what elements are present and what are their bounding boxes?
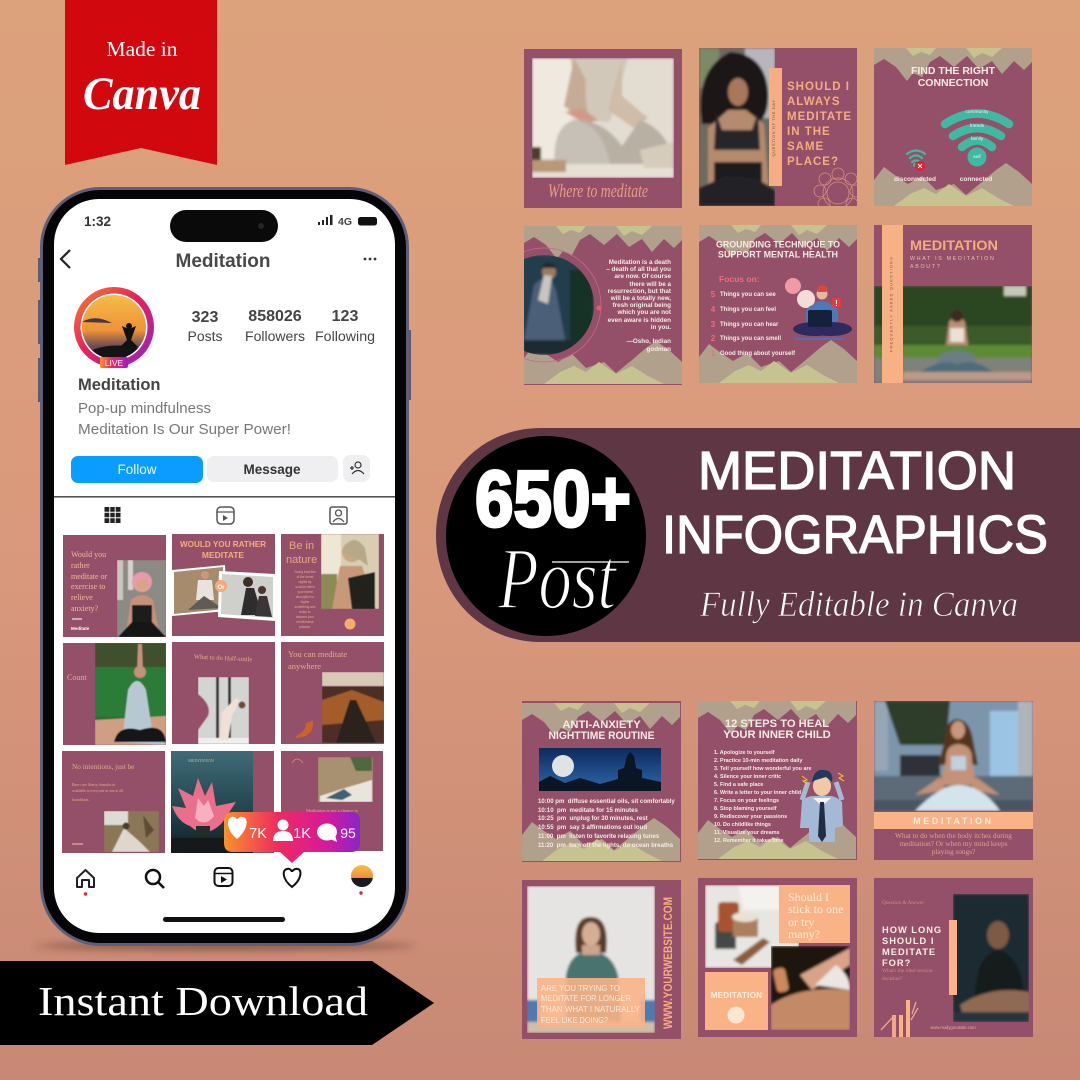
- action buttons: [71, 455, 370, 483]
- template tile: 12 steps to heal your inner child: 7. Focus on your feelings: [714, 798, 779, 804]
- template tile: where to meditate: [524, 49, 682, 208]
- template tile: Osho quote: are now. Of course: [615, 273, 671, 280]
- template tile: your website: [522, 880, 681, 1039]
- template tile: how long should I meditate: duration?: [882, 976, 903, 982]
- phone feed post: rather meditate or exercise: rather: [71, 561, 90, 570]
- bottom navigation: [77, 865, 374, 922]
- phone feed post: child pose: Meditation is not a chance to: [306, 808, 359, 813]
- template tile: grounding technique: 1: [711, 349, 716, 358]
- template tile: grounding technique: Things you can hear: [720, 322, 779, 328]
- template tile: grounding technique: 3: [711, 320, 716, 329]
- action buttons: Follow: [117, 462, 157, 477]
- phone feed post: would you rather meditate: MEDITATE: [202, 550, 244, 560]
- template tile: Osho quote: even aware is hidden: [608, 317, 671, 324]
- template tile: 12 steps to heal your inner child: 3. Tell yourself how wonderful you are: [714, 766, 812, 772]
- illustration: seated person with laptop: [785, 278, 852, 340]
- template tile: Osho quote: Meditation is a death: [609, 259, 671, 266]
- profile bio: Pop-up mindfulness: [78, 401, 211, 417]
- template tile: your website: MEDITATE FOR LONGER: [541, 994, 631, 1003]
- template tile: grounding technique: Things you can see: [720, 292, 776, 298]
- phone feed post: be in nature: of the forest: [297, 575, 314, 579]
- phone feed post: be in nature: something and: [295, 605, 316, 609]
- notification badge: 7K likes, 1K followers, 95 comments: 1K: [293, 826, 311, 842]
- template tile: 12 steps to heal your inner child: 2. Practice 10-min meditation daily: [714, 758, 802, 764]
- template tile: 12 steps to heal your inner child: YOUR INNER CHILD: [723, 729, 831, 741]
- template tile: where to meditate: Where to meditate: [548, 181, 648, 202]
- ribbon: instant download: Instant Download: [38, 978, 368, 1024]
- heading: MEDITATION: [698, 441, 1016, 501]
- template tile: 12 steps to heal your inner child: 1. Apologize to yourself: [714, 750, 775, 756]
- profile stats: [187, 308, 375, 344]
- phone feed post: half-smile: [172, 642, 275, 744]
- profile bio: Meditation: [78, 376, 160, 394]
- phone feed post: would you rather meditate: WOULD YOU RATHER: [180, 539, 266, 549]
- template tile: find the right connection: CONNECTION: [918, 77, 988, 89]
- template tile: grounding technique: 2: [711, 334, 716, 343]
- badge: 650+ Post: Post: [497, 531, 618, 628]
- phone feed post: be in nature: balance your: [296, 615, 315, 619]
- icon: mandala: [814, 168, 857, 206]
- profile tabs: [54, 496, 395, 524]
- profile stats: 123: [332, 308, 358, 325]
- template tile: grounding technique: 4: [711, 305, 716, 314]
- template tile: 12 steps to heal your inner child: 9. Rediscover your passions: [714, 814, 787, 820]
- template tile: should I stick to one: Should I: [788, 890, 829, 904]
- template tile: Osho quote: which you are not: [616, 309, 672, 316]
- template tile: your website: THAN WHAT I NATURALLY: [541, 1005, 641, 1014]
- template tile: should I stick to one: or try: [788, 915, 814, 929]
- template tile: should I always meditate in the same place: PLACE?: [787, 156, 839, 168]
- template tile: grounding technique: Focus on:: [719, 274, 760, 284]
- notification badge: 7K likes, 1K followers, 95 comments: [224, 812, 360, 863]
- template tile: grounding technique: SUPPORT MENTAL HEALTH: [718, 250, 838, 260]
- phone feed post: be in nature: nights by: [299, 580, 312, 584]
- notification badge: 7K likes, 1K followers, 95 comments: 7K: [249, 826, 267, 842]
- template tile: anti-anxiety nighttime routine: 11:00 pm listen to favorite relaxing tunes: [538, 833, 660, 840]
- ribbon: Made in Canva: Made in: [106, 37, 178, 61]
- template tile: should I always meditate in the same place: SAME: [787, 141, 824, 153]
- phone feed post: no intentions: foundation.: [72, 798, 89, 802]
- template tile: should I stick to one: stick to one: [788, 902, 843, 916]
- icon: disconnected wifi: [907, 150, 925, 171]
- phone feed post: rather meditate or exercise: anxiety?: [71, 604, 99, 613]
- night sky image: [539, 748, 661, 791]
- phone feed post: no intentions: Bare-care liberty formula its: [72, 783, 116, 787]
- template tile: should I stick to one: [698, 878, 857, 1037]
- phone feed post: be in nature: [281, 534, 384, 636]
- template tile: Osho quote: there will be a: [629, 281, 671, 288]
- icon: wifi signal: [945, 109, 1009, 166]
- template tile: should I stick to one: MEDITATION: [711, 991, 762, 1000]
- template tile: 12 steps to heal your inner child: 4. Silence your inner critic: [714, 774, 781, 780]
- template tile: anti-anxiety nighttime routine: 10:00 pm diffuse essential oils, sit comfortably: [538, 798, 675, 805]
- icon: bamboo: [881, 1000, 918, 1037]
- template tile: Osho quote: – death of all that you: [606, 266, 671, 273]
- template tile: how long should I meditate: MEDITATE: [882, 947, 936, 957]
- template tile: should I always meditate in the same place: QUESTION OF THE DAY: [771, 99, 776, 157]
- template tile: 12 steps to heal your inner child: 12 STEPS TO HEAL: [725, 718, 829, 730]
- template tile: how long should I meditate: [874, 878, 1033, 1037]
- template tile: Osho quote: in you.: [651, 324, 671, 331]
- phone feed post: be in nature: sounds within: [295, 585, 315, 589]
- phone feed post: be in nature: mindfulness: [296, 620, 314, 624]
- icon: wifi signal: family: [971, 136, 984, 142]
- illustration: seated person with laptop: !: [835, 299, 838, 308]
- illustration: stressed man: [800, 770, 844, 842]
- template tile: grounding technique: Good thing about yourself: [720, 351, 796, 357]
- template tile: meditation rooftop photo: [874, 701, 1033, 860]
- profile avatar: LIVE: [105, 358, 124, 368]
- icon: heart: [228, 817, 247, 839]
- status bar: 4G: [338, 216, 352, 228]
- template tile: meditation rooftop photo: What to do when the body itches during: [895, 831, 1012, 840]
- template tile: how long should I meditate: What's the ideal session: [882, 968, 933, 974]
- phone feed post: be in nature: Young travelers: [294, 570, 316, 574]
- template tile: anti-anxiety nighttime routine: 10:55 pm say 3 affirmations out loud: [538, 824, 647, 831]
- phone feed post: child pose: [281, 751, 383, 851]
- template tile: 12 steps to heal your inner child: 11. Visualize your dreams: [714, 830, 780, 836]
- status bar: 1:32: [84, 214, 111, 229]
- status bar: [84, 210, 377, 242]
- profile stats: 323: [192, 309, 218, 326]
- template tile: Osho quote: [524, 226, 682, 385]
- template tile: find the right connection: [874, 48, 1032, 206]
- profile header: Meditation: [176, 251, 270, 272]
- phone feed post: would you rather meditate: [172, 534, 275, 636]
- profile header: [61, 250, 376, 272]
- profile bio: Meditation Is Our Super Power!: [78, 422, 291, 438]
- template tile: meditation frequently asked questions: [874, 225, 1032, 383]
- profile stats: Posts: [187, 328, 223, 344]
- ribbon: Made in Canva: [65, 0, 217, 165]
- template tile: meditation rooftop photo: meditation? Or when my mind keeps: [899, 839, 1008, 848]
- template tile: how long should I meditate: HOW LONG: [882, 925, 942, 935]
- phone feed post: count: Count: [67, 673, 87, 682]
- phone feed post: no intentions: [62, 751, 165, 853]
- template tile: Osho quote: fresh original being: [613, 302, 671, 309]
- template tile: how long should I meditate: Question & Answer: [882, 900, 924, 906]
- phone feed post: rather meditate or exercise: [63, 535, 166, 637]
- template tile: find the right connection: connected: [960, 176, 992, 183]
- template tile: grounding technique: 5: [711, 290, 716, 299]
- template tile: your website: WWW.YOURWEBSITE.COM: [663, 897, 675, 1029]
- phone feed post: be in nature: nature: [286, 554, 317, 566]
- phone feed post: be in nature: absorption to: [296, 595, 314, 599]
- template tile: meditation rooftop photo: playing songs?: [932, 847, 975, 856]
- template tile: anti-anxiety nighttime routine: [522, 701, 681, 862]
- phone feed post: would you rather meditate: Or: [217, 585, 225, 591]
- heading: [662, 441, 1048, 565]
- template tile: how long should I meditate: SHOULD I: [882, 936, 934, 946]
- template tile: 12 steps to heal your inner child: 8. Stop blaming yourself: [714, 806, 777, 812]
- action buttons: Message: [243, 462, 301, 477]
- phone feed post: no intentions: available to everyone at one at all: [72, 789, 123, 793]
- template tile: grounding technique: Things you can smell: [720, 336, 781, 342]
- template tile: anti-anxiety nighttime routine: 10:25 pm unplug for 30 minutes, rest: [538, 815, 648, 822]
- template tile: grounding technique: Things you can feel: [720, 307, 776, 313]
- template tile: meditation frequently asked questions: WHAT IS MEDITATION: [910, 256, 996, 262]
- heading: INFOGRAPHICS: [662, 505, 1048, 565]
- icon: lotus emblem: [728, 1006, 744, 1024]
- template tile: find the right connection: FIND THE RIGHT: [911, 65, 996, 77]
- template tile: 12 steps to heal your inner child: 5. Find a safe place: [714, 782, 763, 788]
- template tile: 12 steps to heal your inner child: 6. Write a letter to your inner child: [714, 790, 801, 796]
- template tile: Osho quote: will be a totally new,: [610, 295, 671, 302]
- template tile: grounding technique: GROUNDING TECHNIQUE TO: [716, 240, 840, 250]
- phone feed post: be in nature: helps to: [299, 610, 311, 614]
- template tile: should I always meditate in the same place: MEDITATE: [787, 111, 852, 123]
- template tile: meditation frequently asked questions: ABOUT?: [910, 264, 941, 270]
- profile stats: Followers: [245, 328, 305, 344]
- phone feed post: no intentions: No intentions, just be: [72, 762, 134, 771]
- phone feed post: lotus: MEDITATION: [188, 758, 214, 763]
- phone feed post: be in nature: Be in: [289, 540, 314, 552]
- template tile: should I always meditate in the same place: IN THE: [787, 126, 831, 138]
- phone feed post: be in nature: your forest: [297, 590, 313, 594]
- icon: wifi signal: community: [965, 109, 989, 115]
- profile avatar: [74, 287, 154, 368]
- tagline: Fully Editable in Canva: [699, 584, 1018, 624]
- badge: 650+ Post: [446, 436, 646, 636]
- banner: 650+ meditation infographics: [436, 428, 1080, 642]
- profile bio: [78, 376, 291, 438]
- phone feed post: rather meditate or exercise: relieve: [71, 593, 93, 602]
- template tile: 12 steps to heal your inner child: [698, 701, 857, 860]
- phone mockup: [35, 187, 415, 950]
- template tile: 12 steps to heal your inner child: 12. Remember it takes time: [714, 838, 784, 844]
- phone feed post: be in nature: practice.: [299, 625, 311, 629]
- phone feed post: you can meditate anywhere: anywhere: [288, 661, 321, 671]
- template tile: how long should I meditate: FOR?: [882, 958, 911, 968]
- phone feed post: half-smile: What to do Half-smile: [194, 653, 252, 664]
- template tile: anti-anxiety nighttime routine: 11:20 pm turn off the lights, do ocean breaths: [538, 842, 674, 849]
- phone feed post: rather meditate or exercise: Meditate: [71, 626, 90, 631]
- template tile: how long should I meditate: www.reallygreatsite.com: [930, 1025, 976, 1030]
- template tile: Osho quote: —Osho, Indian: [627, 338, 671, 345]
- template tile: your website: ARE YOU TRYING TO: [541, 984, 620, 993]
- template tile: grounding technique: [699, 225, 857, 383]
- template tile: should I always meditate in the same place: SHOULD I: [787, 81, 850, 93]
- template tile: should I always meditate in the same place: [699, 48, 862, 210]
- template tile: anti-anxiety nighttime routine: 10:10 pm meditate for 15 minutes: [538, 807, 639, 814]
- template tile: your website: FEEL LIKE DOING?: [541, 1016, 609, 1025]
- icon: wifi signal: friends: [970, 123, 985, 129]
- phone feed post: you can meditate anywhere: You can meditate: [288, 649, 347, 659]
- phone feed post: rather meditate or exercise: meditate or: [71, 572, 108, 581]
- ribbon: instant download: [0, 961, 434, 1045]
- template tile: 12 steps to heal your inner child: 10. Do childlike things: [714, 822, 771, 828]
- ribbon: Made in Canva: Canva: [83, 68, 201, 120]
- template tile: Osho quote: godman: [646, 346, 671, 353]
- phone feed post: count: [63, 643, 166, 745]
- template tile: should I always meditate in the same place: ALWAYS: [787, 96, 841, 108]
- phone feed post: be in nature: higher: [301, 600, 310, 604]
- template tile: meditation frequently asked questions: FREQUENTLY ASKED QUESTIONS: [890, 256, 894, 352]
- template tile: find the right connection: disconnected: [894, 176, 936, 183]
- phone feed post: you can meditate anywhere: [281, 642, 384, 744]
- template tile: meditation rooftop photo: MEDITATION: [913, 816, 994, 826]
- icon: wifi signal: self: [973, 154, 981, 160]
- template tile: should I stick to one: many?: [788, 927, 820, 941]
- phone feed post: rather meditate or exercise: exercise to: [71, 582, 105, 591]
- template tile: Osho quote: resurrection, but that: [608, 288, 672, 295]
- phone feed post: lotus: [171, 751, 274, 853]
- profile stats: 858026: [248, 308, 302, 325]
- template tile: anti-anxiety nighttime routine: ANTI-ANXIETY: [562, 719, 641, 731]
- profile stats: Following: [315, 328, 375, 344]
- template tile: anti-anxiety nighttime routine: NIGHTTIME ROUTINE: [548, 730, 655, 742]
- badge: 650+ Post: 650+: [475, 454, 631, 543]
- notification badge: 7K likes, 1K followers, 95 comments: 95: [340, 825, 356, 841]
- phone feed post: rather meditate or exercise: Would you: [71, 550, 106, 559]
- template tile: meditation frequently asked questions: MEDITATION: [910, 238, 998, 253]
